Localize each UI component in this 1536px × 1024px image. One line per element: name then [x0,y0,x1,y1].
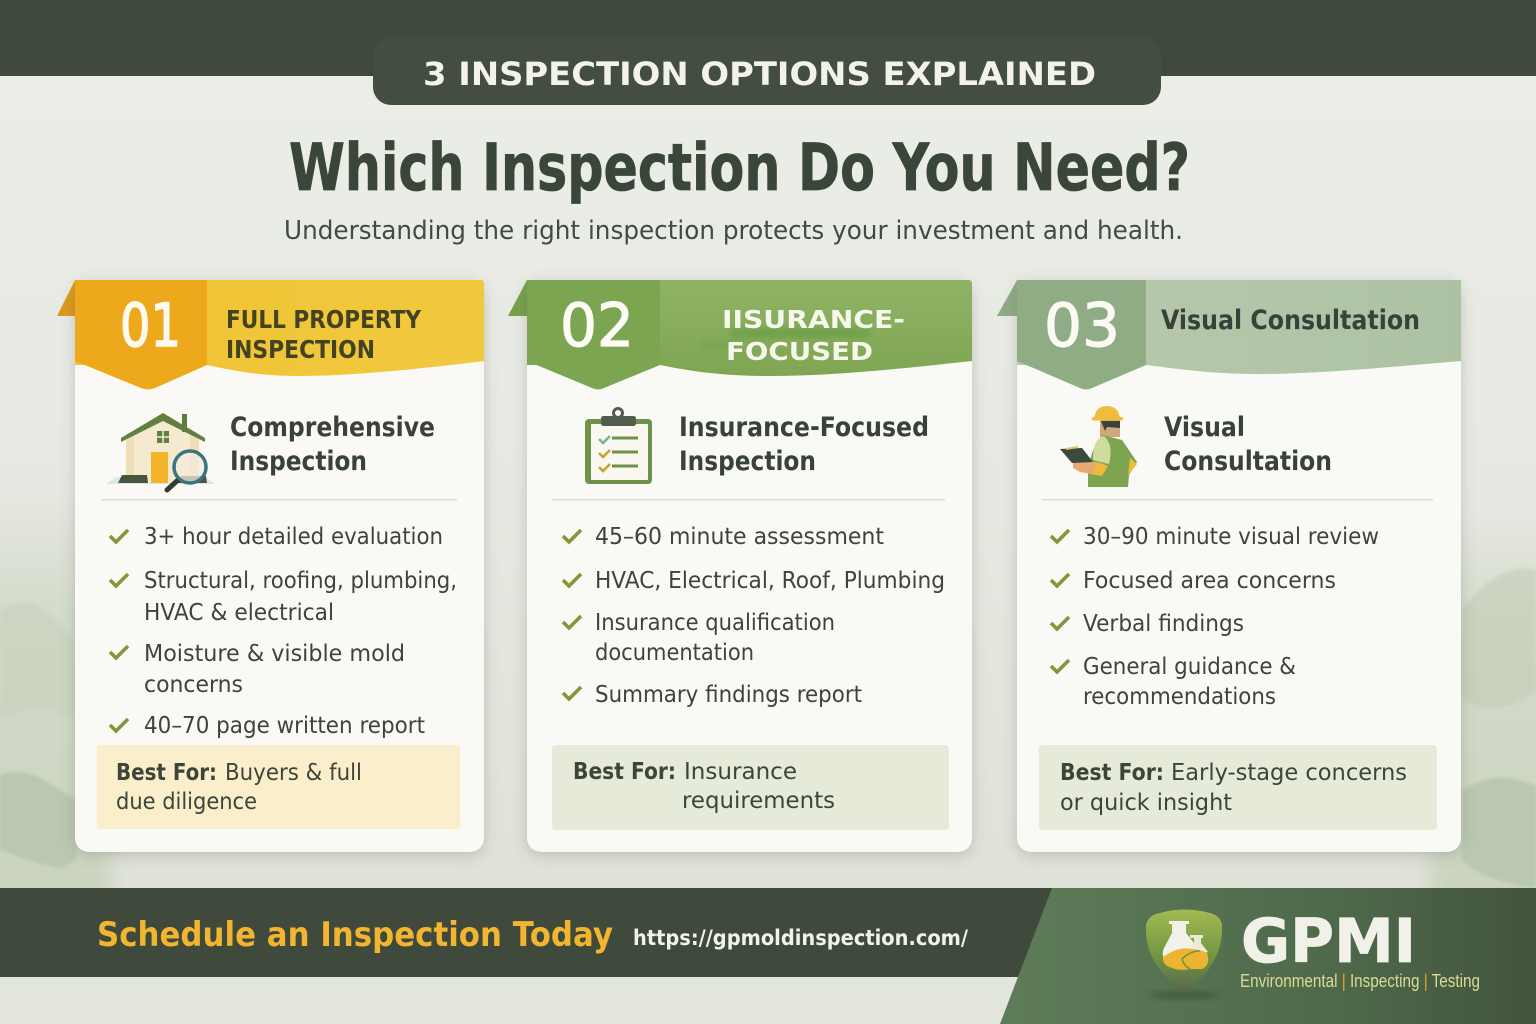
card 2 header title [722,305,905,366]
card 3 heading: Consultation [1164,446,1332,477]
card 2 checklist [563,524,945,708]
call to action: Schedule an Inspection Today [97,915,613,955]
logo tagline: Environmental | Inspecting | Testing [1240,971,1480,991]
card 2 number tab: 02 [560,291,634,361]
card 1 checklist: concerns [144,672,243,698]
card 3 checklist: General guidance & [1083,654,1296,680]
card 2 best for callout: Best For: [573,759,676,785]
card 3 best for callout: or quick insight [1060,790,1232,816]
card 1 checklist: Structural, roofing, plumbing, [144,568,457,594]
card 3 checklist: Focused area concerns [1083,568,1336,594]
card 1 checklist: 40–70 page written report [144,713,425,739]
card 2 best for callout: Insurance [684,759,797,785]
card 1 number tab: 01 [120,291,181,361]
panel: card 1 full property inspection [57,280,484,852]
card 2 number tab [527,280,660,390]
card 1 best for callout: due diligence [116,789,257,815]
card 3 header band [1017,280,1461,374]
icon: house with magnifier [106,413,215,490]
card 3 number tab [1017,280,1146,390]
card 3 best for callout: Early-stage concerns [1171,760,1407,786]
card 1 checklist [110,524,457,739]
card 3 heading [1164,412,1332,477]
card 2 header band [527,280,972,376]
card 1 heading [230,412,435,477]
card 2 header title: IISURANCE- [722,305,905,334]
card 3 best for callout: Best For: [1060,760,1164,786]
card 3 checklist: Verbal findings [1083,611,1244,637]
website url: https://gpmoldinspection.com/ [633,926,968,950]
card 2 heading [679,412,929,477]
icon: clipboard checklist [585,408,652,484]
card 1 best for callout [97,745,460,829]
card 2 checklist: Summary findings report [595,682,862,708]
footer logo panel [1000,888,1536,1024]
panel: card 3 visual consultation [997,280,1461,852]
card 1 best for callout: Buyers & full [225,760,362,786]
banner pill [373,37,1161,105]
card 3 heading: Visual [1164,412,1245,443]
banner text: 3 INSPECTION OPTIONS EXPLAINED [423,55,1096,93]
card 1 best for callout: Best For: [116,760,217,786]
card 2 best for callout: requirements [682,788,835,814]
card 1 heading: Comprehensive [230,412,435,443]
card 1 heading: Inspection [230,446,367,477]
card 2 checklist: documentation [595,640,754,666]
card 1 checklist: 3+ hour detailed evaluation [144,524,443,550]
card 1 header title: INSPECTION [226,335,375,364]
card 2 checklist: HVAC, Electrical, Roof, Plumbing [595,568,945,594]
card 2 checklist: Insurance qualification [595,610,835,636]
card 3 header title: Visual Consultation [1161,305,1420,336]
subtitle: Understanding the right inspection protects your investment and health. [284,216,1183,246]
card 1 number tab [75,280,207,390]
card 2 checklist: 45–60 minute assessment [595,524,884,550]
title: Which Inspection Do You Need? [289,131,1190,206]
card 1 checklist: HVAC & electrical [144,600,334,626]
card 1 header title: FULL PROPERTY [226,305,422,334]
top band [0,0,1536,76]
icon: inspector with clipboard [1060,406,1137,487]
card 1 checklist: Moisture & visible mold [144,641,405,667]
card 2 heading: Inspection [679,446,816,477]
card 3 checklist [1051,524,1379,710]
card 1 header band [75,280,484,376]
logo shield [1146,910,1222,998]
card 3 best for callout [1039,745,1437,830]
card 3 checklist: 30–90 minute visual review [1083,524,1379,550]
card 2 best for callout [552,745,949,830]
logo wordmark: GPMI [1241,906,1416,977]
card 1 header title [226,305,422,364]
card 3 checklist: recommendations [1083,684,1276,710]
card 3 number tab: 03 [1044,291,1120,361]
footer band [0,888,1060,977]
card 2 heading: Insurance-Focused [679,412,929,443]
card 2 header title: FOCUSED [726,337,873,366]
panel: card 2 insurance-focused [508,280,972,852]
